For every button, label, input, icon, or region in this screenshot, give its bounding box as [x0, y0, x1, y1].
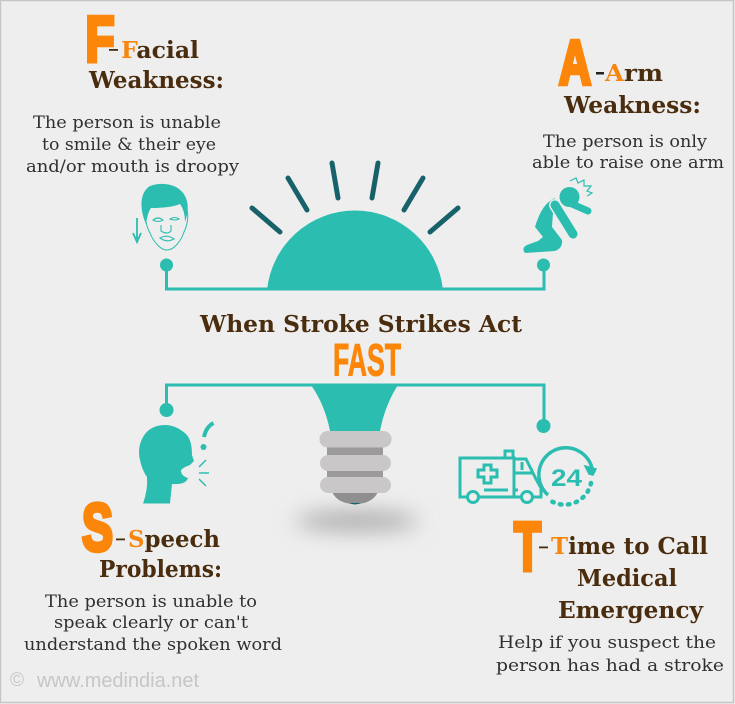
text: A description: able to raise one arm — [532, 153, 724, 172]
text: S description: The person is unable to — [45, 592, 257, 611]
heading: A arm weakness: Weakness: — [563, 92, 701, 119]
text: T description: person has had a stroke — [496, 656, 724, 675]
icon: bulb glow semicircle — [267, 210, 443, 290]
watermark: © — [10, 670, 24, 691]
text: S description: speak clearly or can't — [54, 613, 248, 632]
watermark: www.medindia.net — [36, 670, 199, 692]
icon: ambulance and 24 hour clock: 24 — [551, 465, 583, 492]
heading: A arm weakness: Arm — [604, 60, 663, 87]
heading: A arm weakness: A — [559, 29, 591, 98]
heading: S speech problems: Problems: — [99, 556, 222, 583]
title: FAST: FAST — [333, 334, 401, 386]
text: T description — [496, 633, 724, 675]
icon: person with weak arm — [523, 178, 592, 253]
text: A description — [532, 132, 724, 172]
icon: ambulance and 24 hour clock — [460, 448, 596, 505]
text: F description — [26, 113, 240, 176]
heading: F facial weakness: F — [86, 3, 114, 75]
heading: T time to call medical emergency: Time to Call — [551, 533, 708, 560]
heading: F facial weakness: Weakness: — [88, 67, 224, 94]
text: F description: to smile & their eye — [42, 135, 216, 154]
text: A description: The person is only — [543, 132, 708, 151]
text: F description: and/or mouth is droopy — [26, 157, 240, 176]
text: F description: The person is unable — [33, 113, 221, 132]
heading: F facial weakness: Facial — [121, 37, 199, 64]
text: S description — [24, 592, 282, 654]
text: T description: Help if you suspect the — [498, 633, 716, 652]
bottom connector line — [160, 385, 550, 433]
heading: S speech problems — [82, 490, 222, 583]
heading: S speech problems: S — [82, 490, 113, 566]
icon: drooping face — [133, 184, 188, 250]
icon: bulb base — [295, 385, 419, 530]
heading: T time to call medical emergency: Emergency — [558, 597, 704, 624]
heading: T time to call medical emergency: T — [514, 508, 541, 585]
icon: bulb rays — [252, 163, 458, 232]
heading: F facial weakness — [86, 3, 224, 94]
heading: S speech problems: Speech — [128, 526, 220, 553]
heading: T time to call medical emergency — [514, 508, 708, 624]
text: S description: understand the spoken word — [24, 635, 282, 654]
heading: A arm weakness — [559, 29, 701, 119]
title: When Stroke Strikes Act — [199, 310, 522, 338]
heading: T time to call medical emergency: Medical — [577, 565, 677, 592]
top connector line — [160, 258, 550, 289]
icon: speaking head — [139, 423, 214, 504]
